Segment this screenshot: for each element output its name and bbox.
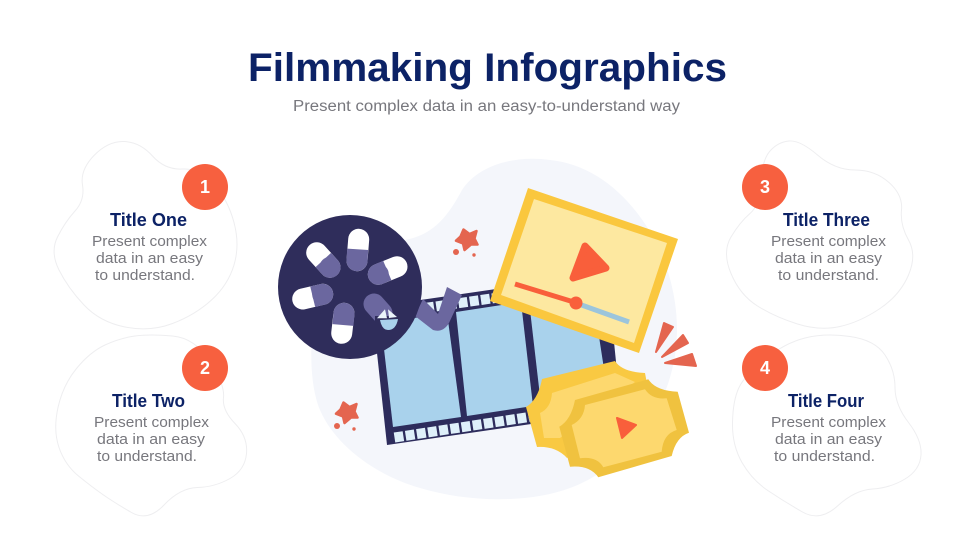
subtitle: Present complex data in an easy-to-understand way [293,98,680,115]
panel: title four: data in an easy [775,431,883,448]
central background blob [311,159,677,499]
icon: ticket play [617,418,636,438]
panel: title two: 2 [200,358,210,378]
panel: title four: Title Four [788,391,864,411]
icon: burst lines [656,323,696,366]
back ticket [526,361,650,458]
icon: star top [453,230,478,257]
panel: title three: to understand. [778,267,879,284]
panel: title four: Present complex [771,414,887,431]
panel: title two: data in an easy [97,431,206,448]
panel: title one: to understand. [95,267,195,284]
panel: title one: Present complex [92,233,208,250]
panel: title one [54,141,237,329]
progress bar [515,284,629,322]
panel: title three [726,141,913,328]
panel: title four: 4 [760,358,770,378]
panel: title one: data in an easy [96,250,204,267]
panel: title three: data in an easy [775,250,883,267]
panel: title one: 1 [200,177,210,197]
front ticket [559,379,689,477]
film reel [278,215,422,359]
panel: title two: to understand. [97,448,197,465]
film ribbon [415,287,462,331]
film strip [372,273,621,445]
icon: star bottom [334,402,358,431]
panel: title four: to understand. [774,448,875,465]
panel: title two [56,335,247,516]
panel: title three: 3 [760,177,770,197]
panel: title four [732,335,921,516]
panel: title three: Present complex [771,233,887,250]
video player card [490,188,678,353]
panel: title two: Title Two [112,391,185,411]
panel: title three: Title Three [783,210,870,230]
panel: title two: Present complex [94,414,210,431]
panel: title one: Title One [110,210,187,230]
title: Filmmaking Infographics [248,46,727,90]
icon: play triangle [573,246,606,278]
